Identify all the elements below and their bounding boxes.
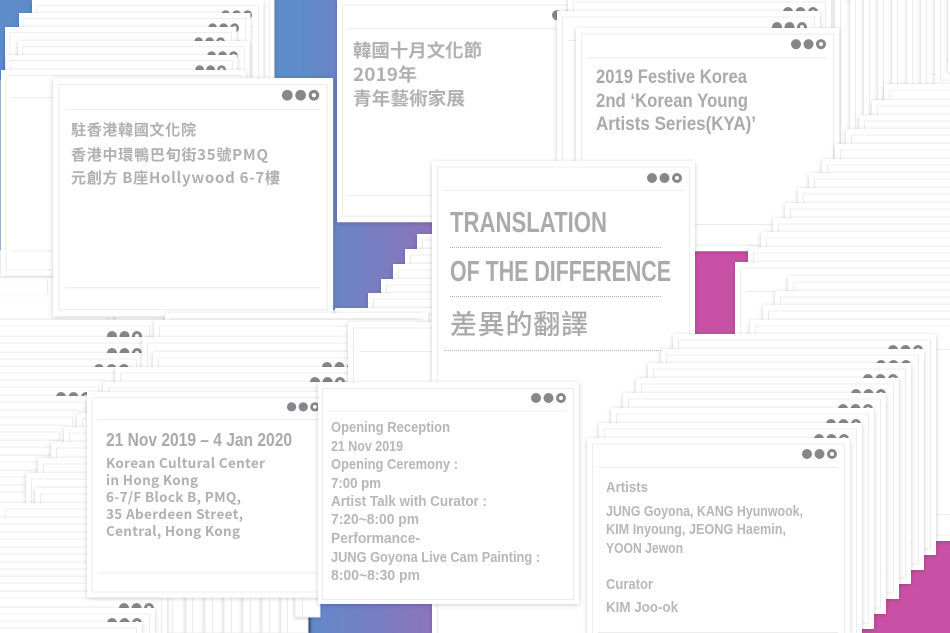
English festival title text: 2019 Festive Korea — [596, 67, 747, 88]
card stack: bottom vertical edges — [165, 585, 320, 633]
artists text — [606, 480, 803, 557]
Korean address text: 元創方 B座Hollywood 6-7樓 — [71, 167, 280, 188]
venue text: Central, Hong Kong — [106, 520, 240, 540]
Korean festival title text: 青年藝術家展 — [353, 85, 465, 111]
card stack: top right vertical edges — [835, 0, 950, 193]
Korean address text — [71, 119, 280, 188]
schedule text: Opening Reception — [331, 420, 450, 436]
panel: Korean address — [53, 78, 333, 316]
artists text: KIM Inyoung, JEONG Haemin, — [606, 522, 786, 538]
main title text: OF THE DIFFERENCE — [450, 256, 671, 288]
venue text: 35 Aberdeen Street, — [106, 503, 243, 523]
schedule text: Opening Ceremony : — [331, 457, 458, 473]
card stack: right staircase — [735, 84, 950, 541]
schedule text: 8:00~8:30 pm — [331, 568, 420, 584]
panel: dates and venue — [87, 392, 332, 598]
Korean address text: 駐香港韓國文化院 — [71, 119, 196, 140]
venue text: Korean Cultural Center — [106, 452, 265, 472]
schedule text: Performance- — [331, 531, 420, 547]
panel: English title — [576, 28, 839, 251]
gradient block under the schedule card — [308, 600, 432, 633]
venue text: 6-7/F Block B, PMQ, — [106, 486, 241, 506]
artists text: JUNG Goyona, KANG Hyunwook, — [606, 504, 803, 520]
panel: artists and curator — [587, 438, 850, 633]
Korean festival title text — [353, 37, 482, 111]
schedule text: 7:20~8:00 pm — [331, 512, 419, 528]
magenta colour block — [695, 72, 950, 633]
English festival title text: 2nd ‘Korean Young — [596, 91, 748, 112]
curator text: KIM Joo-ok — [606, 600, 679, 616]
schedule text — [331, 420, 540, 584]
main title text — [450, 207, 671, 342]
schedule text: 21 Nov 2019 — [331, 439, 403, 455]
card stack: middle left rows — [0, 313, 611, 632]
card stack behind artists panel — [599, 334, 936, 633]
Korean festival title text: 2019年 — [353, 61, 417, 87]
card stack: centre staircase over blue — [335, 234, 680, 529]
schedule text: 7:00 pm — [331, 476, 381, 492]
panel: opening schedule — [318, 382, 579, 604]
curator text — [606, 577, 679, 616]
panel: Korean title — [337, 0, 600, 222]
Korean festival title text: 韓國十月文化節 — [353, 37, 482, 63]
panel: main title — [432, 161, 695, 633]
English festival title text — [596, 67, 756, 135]
main title text: 差異的翻譯 — [450, 303, 588, 342]
card stack behind English title — [557, 0, 831, 232]
schedule text: JUNG Goyona Live Cam Painting : — [331, 550, 540, 566]
Korean address text: 香港中環鴨巴旬街35號PMQ — [71, 144, 268, 165]
main title text: TRANSLATION — [450, 207, 607, 239]
artists text: YOON Jewon — [606, 541, 683, 557]
schedule text: Artist Talk with Curator : — [331, 494, 487, 510]
blue colour block — [0, 0, 432, 310]
artists text: Artists — [606, 480, 648, 496]
venue text — [106, 452, 265, 540]
card stack: top left — [0, 0, 274, 328]
card stack: bottom left — [0, 592, 167, 633]
curator text: Curator — [606, 577, 653, 593]
date text: 21 Nov 2019 – 4 Jan 2020 — [106, 430, 292, 450]
English festival title text: Artists Series(KYA)’ — [596, 114, 756, 135]
venue text: in Hong Kong — [106, 469, 198, 489]
